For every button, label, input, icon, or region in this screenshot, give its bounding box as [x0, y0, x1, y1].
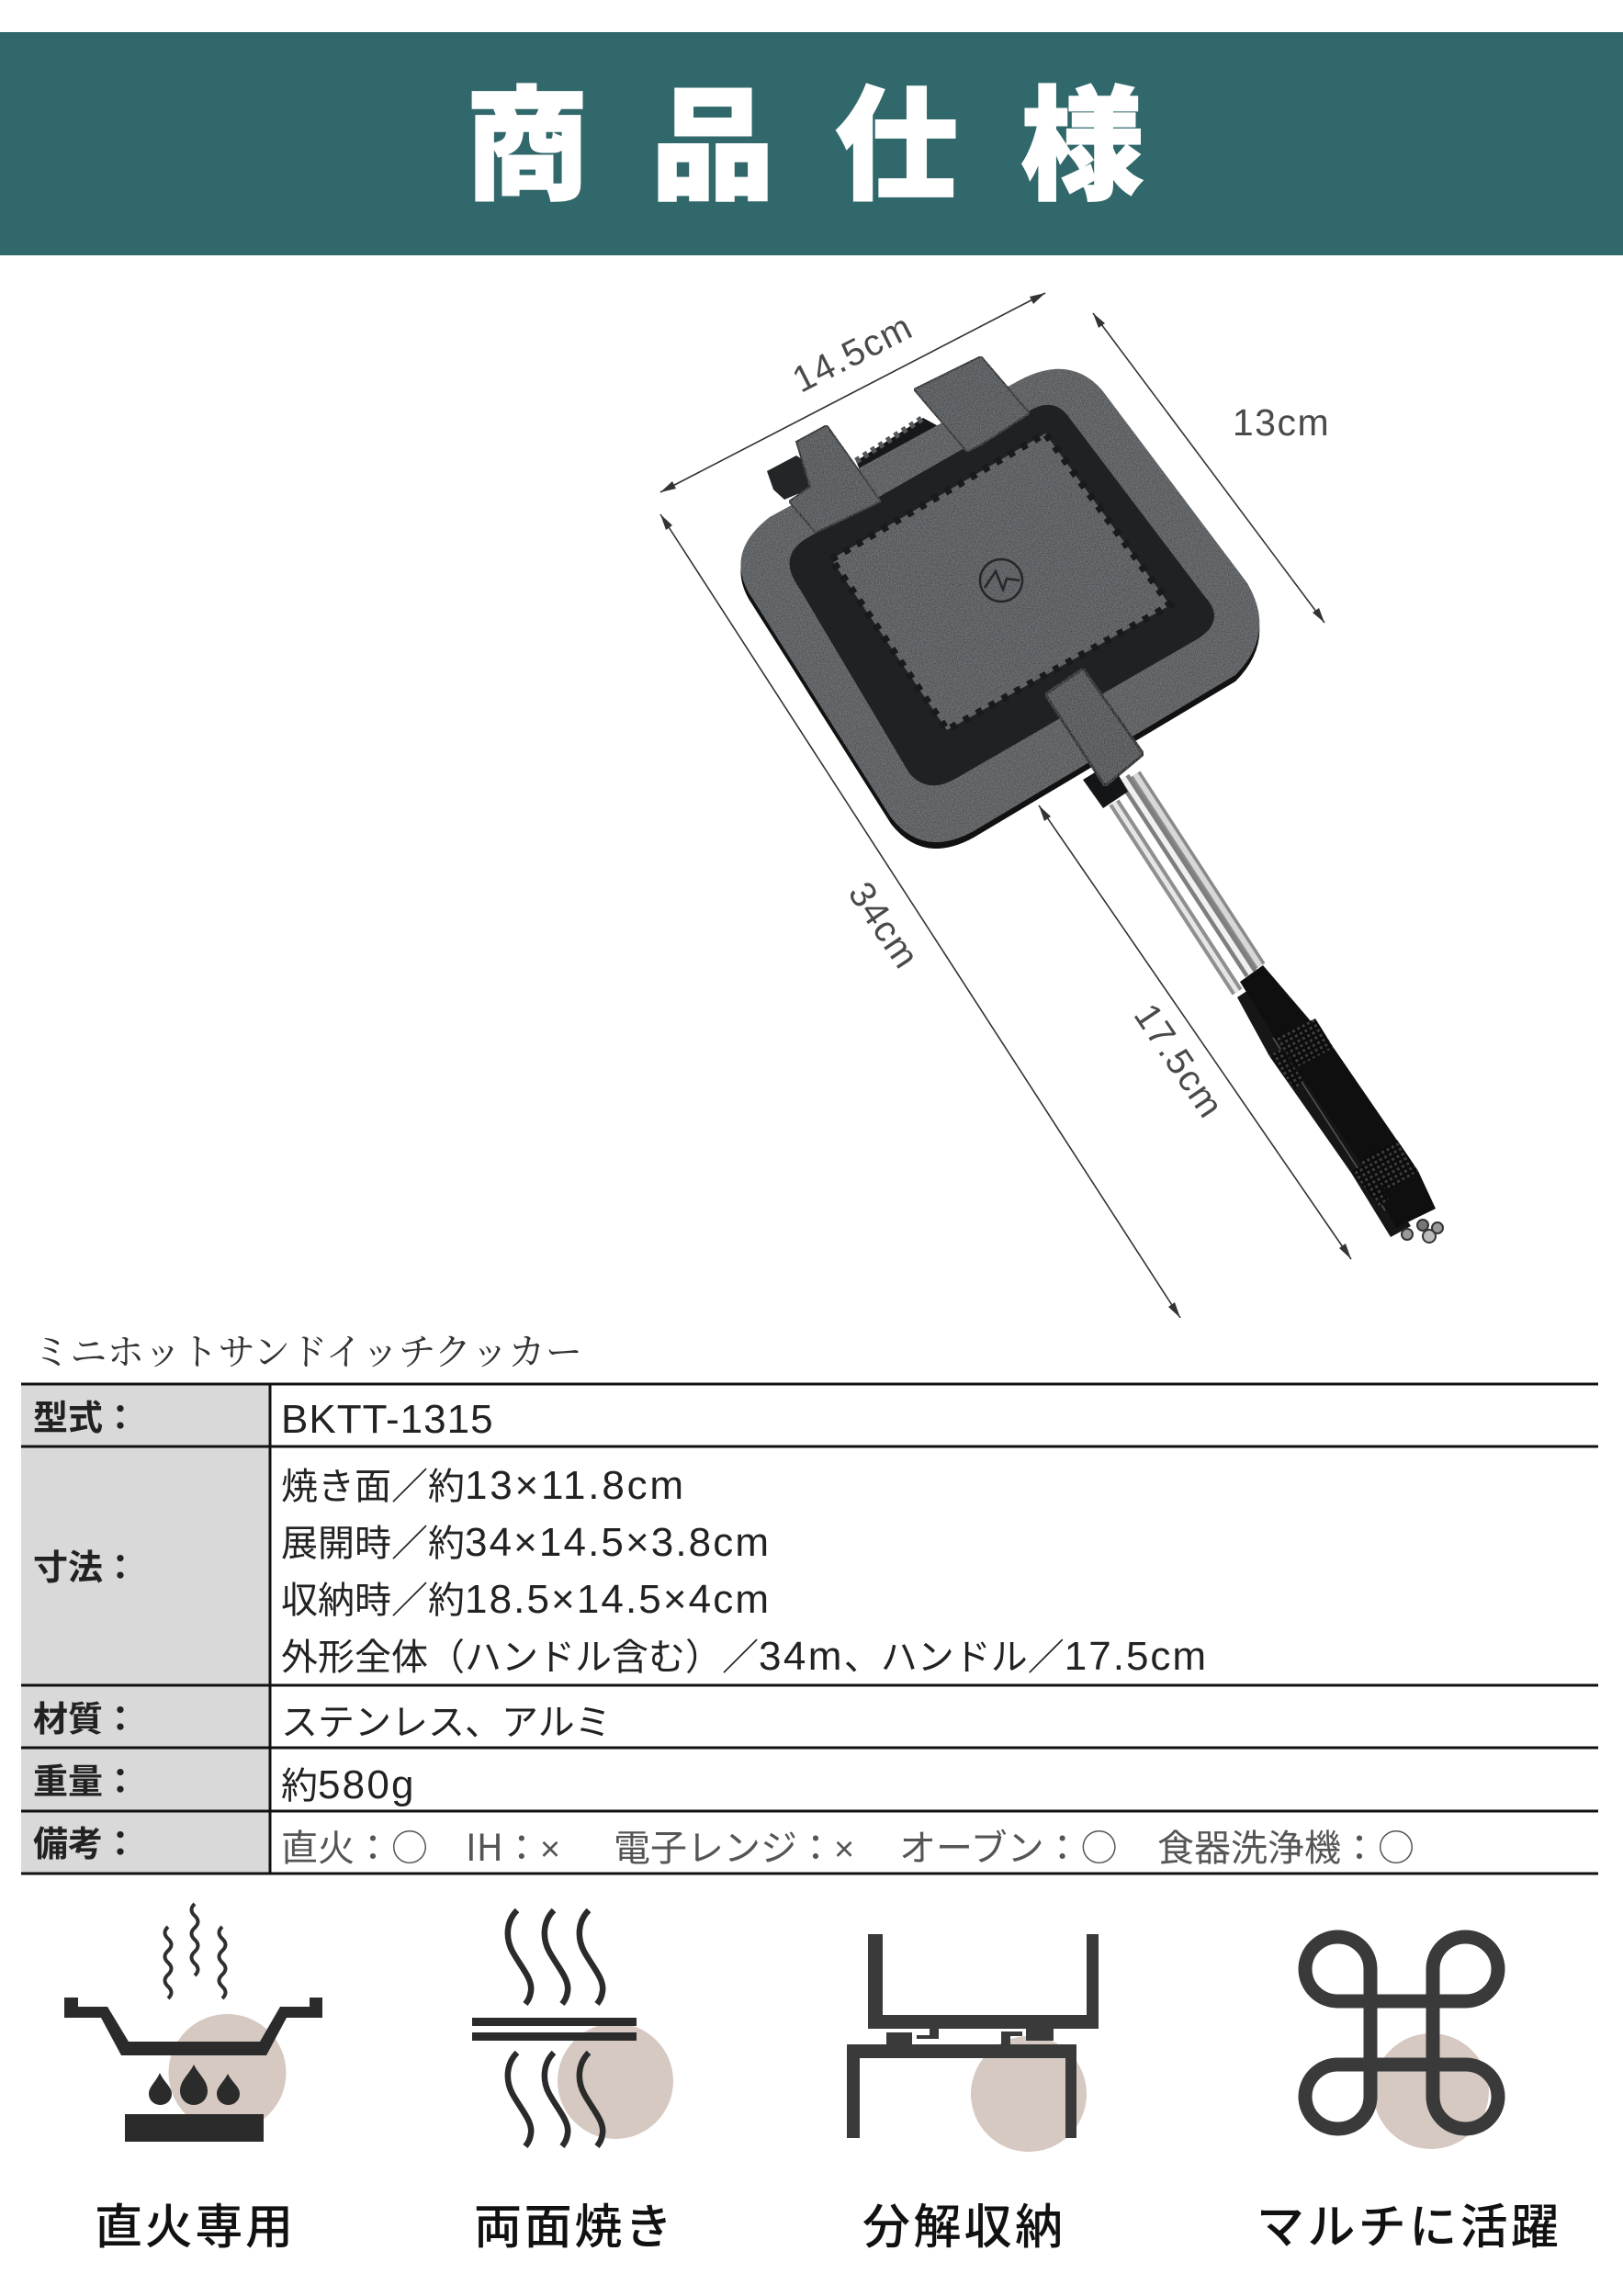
row: notes: 備考：	[33, 1816, 138, 1866]
icon: direct flame	[64, 1904, 322, 2142]
label column background	[21, 1384, 270, 1874]
pan	[64, 1998, 322, 2055]
row: notes: 食器洗浄機：○	[1157, 1818, 1414, 1872]
hinge behind the pan	[856, 418, 960, 514]
pan lower edge shadow	[740, 376, 1259, 849]
handle rods	[1114, 774, 1260, 992]
row: dimensions: 外形全体（ハンドル含む）／34m、ハンドル／17.5cm	[281, 1627, 1208, 1681]
caption: direct flame: 直火専用	[95, 2189, 293, 2257]
row: notes: オーブン：○	[899, 1818, 1118, 1872]
row: dimensions	[33, 1457, 1208, 1681]
steam	[165, 1904, 226, 1998]
row: weight	[33, 1753, 416, 1809]
handle grips	[1237, 965, 1443, 1243]
caption: detachable storage: 分解収納	[862, 2189, 1063, 2257]
lower heat waves	[508, 2053, 603, 2146]
plate serrated edge	[831, 433, 1170, 730]
dimension: 14.5cm: 14.5cm	[786, 306, 919, 400]
icon: detachable storage	[847, 1934, 1099, 2152]
lower half	[847, 2044, 1076, 2138]
dimension: 13cm: 13cm	[1233, 401, 1330, 444]
pan recess	[790, 405, 1214, 785]
row: model: BKTT-1315	[281, 1397, 494, 1442]
dimension: 34cm	[660, 514, 1180, 1318]
row: notes	[33, 1816, 1414, 1872]
burner	[125, 2114, 264, 2142]
hinge tab right	[914, 356, 1030, 452]
row: dimensions: 収納時／約18.5×14.5×4cm	[281, 1570, 771, 1624]
row: material: ステンレス、アルミ	[281, 1693, 612, 1746]
dimension: 34cm: 34cm	[840, 875, 927, 976]
row: notes: 直火：○	[281, 1818, 428, 1872]
connectors	[886, 2032, 912, 2047]
specification table	[21, 1384, 1598, 1874]
pan body outer	[740, 369, 1259, 842]
row: dimensions: 寸法：	[33, 1539, 138, 1590]
upper half	[868, 1934, 1099, 2029]
dimension: 17.5cm: 17.5cm	[1126, 996, 1232, 1126]
product name: ミニホットサンドイッチクッカー	[33, 1322, 582, 1376]
row: dimensions: 焼き面／約13×11.8cm	[281, 1457, 686, 1510]
flames	[149, 2065, 240, 2105]
row: weight: 重量：	[33, 1753, 138, 1804]
title banner	[0, 32, 1623, 255]
dimension: 13cm	[1093, 313, 1330, 623]
row: weight: 約580g	[281, 1756, 416, 1809]
icon: double-sided grill	[472, 1910, 673, 2146]
row: material: 材質：	[33, 1691, 138, 1741]
hinge tab left	[789, 425, 881, 533]
icon: multi-purpose	[1305, 1937, 1498, 2149]
row: model	[33, 1390, 494, 1442]
row: notes: IH：×	[466, 1818, 560, 1872]
upper heat waves	[508, 1910, 603, 2004]
row: model: 型式：	[33, 1390, 138, 1440]
plate logo	[980, 559, 1022, 602]
table rules	[21, 1384, 1598, 1874]
row: notes: 電子レンジ：×	[614, 1818, 854, 1872]
product photo: mini hot sandwich cooker	[740, 356, 1443, 1243]
dimension: 14.5cm	[660, 293, 1045, 492]
dimension: 17.5cm	[1039, 805, 1351, 1259]
title: 商品仕様: 商品仕様	[466, 47, 1144, 225]
row: dimensions: 展開時／約34×14.5×3.8cm	[281, 1514, 771, 1567]
handle bracket	[1045, 669, 1144, 808]
pan center plate	[831, 433, 1170, 730]
plates	[472, 2018, 637, 2026]
caption: multi-purpose: マルチに活躍	[1257, 2189, 1559, 2257]
row: material	[33, 1691, 612, 1746]
hinge knob left	[767, 456, 823, 500]
caption: double-sided grill: 両面焼き	[474, 2189, 672, 2257]
